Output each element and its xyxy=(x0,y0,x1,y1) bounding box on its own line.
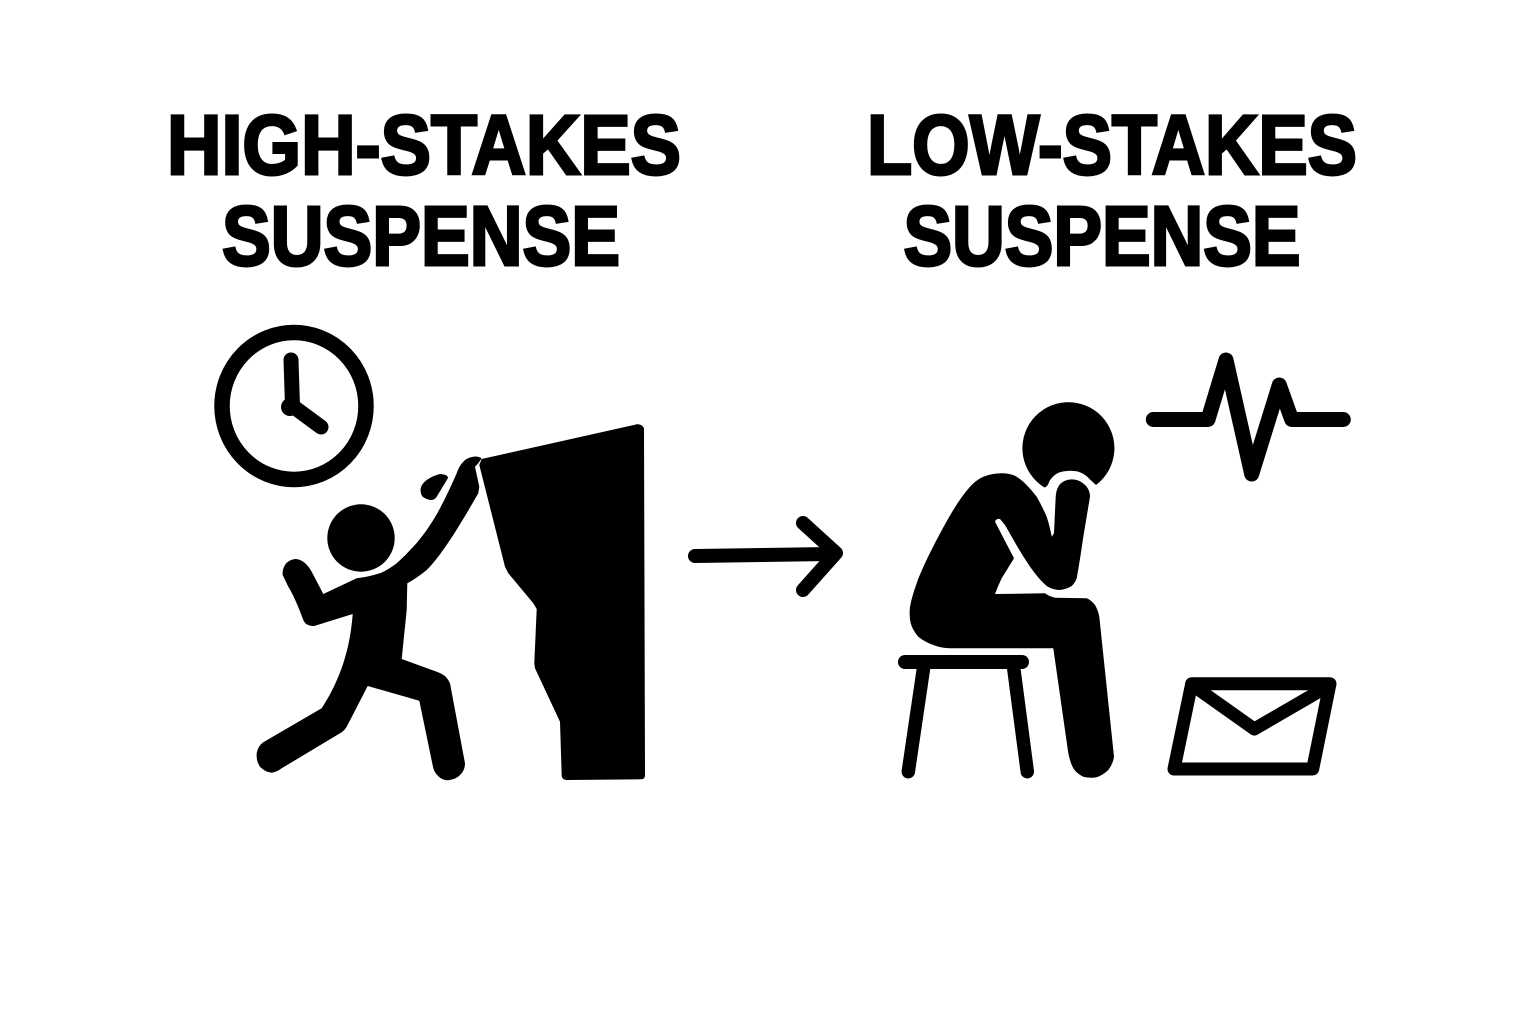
heading: high-stakes suspense xyxy=(167,98,681,283)
stool xyxy=(898,655,1029,772)
seated figure body xyxy=(910,473,1114,778)
sweat drop xyxy=(421,474,448,500)
icon: clock xyxy=(222,332,366,480)
icon: figure hanging from cliff xyxy=(257,424,645,780)
cliff xyxy=(479,424,645,780)
heading: high-stakes suspense: HIGH-STAKES xyxy=(167,98,681,192)
icon: heartbeat line xyxy=(1153,360,1343,474)
heading: low-stakes suspense: SUSPENSE xyxy=(904,189,1300,283)
figure body xyxy=(257,457,482,780)
heading: low-stakes suspense: LOW-STAKES xyxy=(867,98,1357,192)
heading: high-stakes suspense: SUSPENSE xyxy=(222,189,620,283)
arrow xyxy=(695,523,836,590)
seated figure head xyxy=(1022,402,1114,488)
icon: envelope xyxy=(1174,684,1330,769)
heading: low-stakes suspense xyxy=(867,98,1357,283)
icon: anxious seated figure xyxy=(898,402,1114,778)
figure head xyxy=(327,504,395,572)
